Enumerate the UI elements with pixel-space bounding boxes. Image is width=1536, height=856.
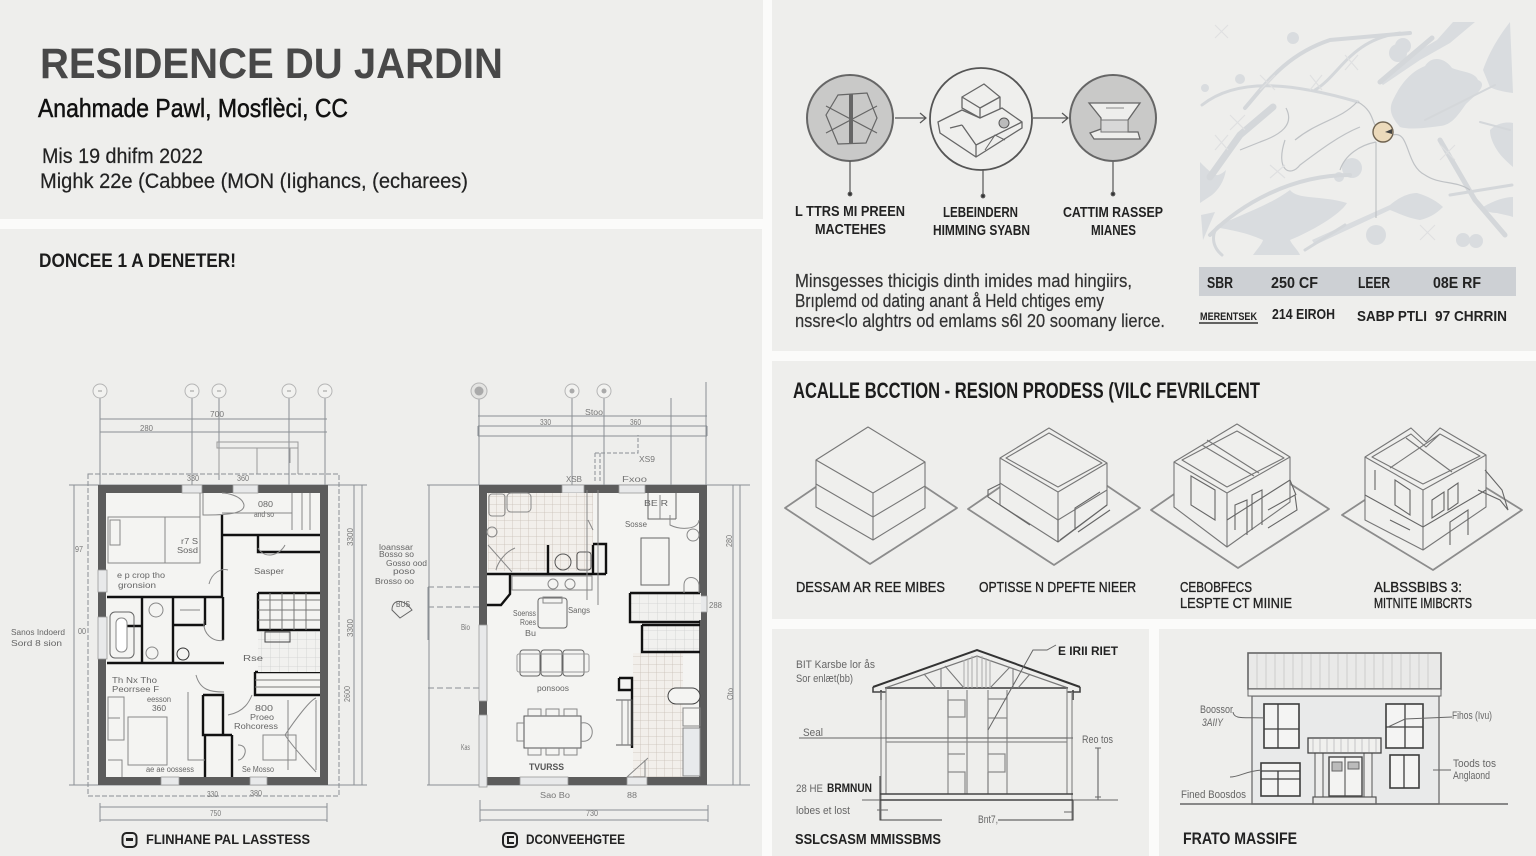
room labels: ae ae oossess — [146, 765, 194, 774]
panel: front elevation — [1159, 629, 1536, 856]
dimension labels: 750 — [210, 809, 221, 818]
dimension labels: 00 — [78, 627, 86, 636]
elevation annotations: Boossor — [1200, 704, 1233, 716]
project details: Mis 19 dhifm 2022 — [42, 145, 203, 168]
room labels: and so — [254, 510, 274, 519]
massing step 2 — [968, 428, 1140, 565]
room labels: Soenss — [513, 609, 536, 618]
title: RESIDENCE DU JARDIN — [40, 40, 503, 88]
site data table: SABP PTLI — [1357, 308, 1427, 325]
grid bubbles and dimension lines — [69, 384, 367, 822]
section caption: SSLCSASM MMISSBMS — [795, 831, 941, 848]
room labels: Sosse — [625, 520, 648, 529]
arrow — [895, 113, 926, 123]
ground line — [1180, 803, 1508, 805]
dimension labels: Oto — [726, 687, 735, 700]
outer walls — [483, 489, 703, 781]
building section drawing — [795, 644, 1119, 848]
concept paragraph — [795, 271, 1165, 331]
room labels: Roes — [520, 618, 536, 627]
site data table: MERENTSEK — [1200, 311, 1257, 323]
side note — [11, 628, 65, 648]
windows — [1261, 704, 1423, 796]
concept paragraph: Minsgesses thicigis dinth imides mad hingiirs, — [795, 271, 1132, 291]
map water and vegetation masses — [1200, 22, 1513, 255]
project details: Mighk 22e (Cabbee (MON (Iighancs, (echarees) — [40, 170, 468, 193]
room labels: Sasper — [254, 567, 284, 576]
side note with marker: Gosso ood — [386, 559, 427, 568]
room labels: 080 — [258, 500, 274, 509]
walls floors and shaft — [881, 688, 1072, 820]
section annotations: Seal — [803, 727, 823, 739]
datum line and dimension — [799, 738, 1101, 800]
room labels: r7 S — [181, 537, 198, 546]
elevation leaders — [1230, 712, 1452, 777]
subtitle: Anahmade Pawl, Mosflèci, CC — [38, 93, 348, 123]
elevation caption: FRATO MASSIFE — [1183, 829, 1297, 848]
tile floors — [488, 493, 701, 777]
step labels: MACTEHES — [815, 221, 886, 238]
room labels: ponsoos — [537, 684, 569, 693]
icon: form circle — [1070, 75, 1156, 161]
dimension labels: 380 — [250, 789, 262, 798]
dimension labels: 360 — [237, 474, 249, 483]
room labels: eesson — [147, 695, 171, 704]
room labels — [112, 500, 284, 774]
step labels: L TTRS MI PREEN — [795, 203, 905, 220]
side note with marker: loanssar — [379, 543, 413, 552]
panel: title block — [0, 0, 763, 219]
section annotations: Bnt7, — [978, 814, 998, 826]
location marker — [1373, 122, 1393, 142]
site map — [1200, 22, 1513, 255]
elevation annotations: 3AIIY — [1202, 717, 1224, 729]
dimension labels: XS9 — [639, 455, 656, 464]
concept process diagram — [795, 68, 1163, 239]
dimension labels: 330 — [207, 790, 218, 799]
map roads and rivers — [1202, 33, 1512, 255]
slab and foundation — [862, 776, 1118, 820]
room labels: TVURSS — [529, 762, 564, 772]
dimension labels: 360 — [630, 418, 641, 427]
dimension labels — [461, 408, 735, 818]
room labels: BE R — [644, 499, 668, 508]
dimension labels: 700 — [210, 410, 225, 419]
elevation annotations: Fihos (Ivu) — [1452, 710, 1492, 722]
outer walls — [102, 489, 324, 781]
dimension labels: 330 — [540, 418, 551, 427]
massing step labels: ALBSSBIBS 3: — [1374, 579, 1462, 596]
plan caption: FLINHANE PAL LASSTESS — [146, 831, 310, 847]
side note with marker — [375, 543, 427, 618]
massing step labels — [796, 579, 1472, 612]
dimension labels: 3300 — [346, 618, 355, 637]
room labels: Sosd — [177, 546, 198, 555]
site data table: 250 CF — [1271, 275, 1318, 292]
dimension labels: 88 — [627, 791, 638, 800]
room labels: Th Nx Tho — [112, 676, 158, 685]
room labels: Bu — [525, 629, 536, 638]
dimension labels: 2600 — [343, 686, 352, 702]
front elevation drawing — [1180, 653, 1508, 848]
room labels: e p crop tho — [117, 571, 166, 580]
step labels — [795, 203, 1163, 239]
room labels: Rohcoress — [234, 722, 278, 731]
arrow — [1033, 113, 1068, 123]
step labels: MIANES — [1091, 222, 1136, 239]
fixtures and furniture — [487, 490, 700, 777]
room labels — [513, 499, 668, 772]
massing step 4 — [1342, 428, 1522, 570]
icon: volume circle — [930, 68, 1032, 170]
grid bubbles and dimension lines — [427, 382, 750, 822]
entrance porch — [1308, 738, 1381, 804]
floor plan: upper level — [11, 384, 367, 847]
site data table: SBR — [1207, 275, 1233, 292]
interior walls — [487, 544, 700, 748]
section annotations: 28 HE — [796, 783, 823, 795]
interior walls — [107, 515, 320, 777]
massing step labels: OPTISSE N DPEFTE NIEER — [979, 579, 1136, 596]
dimension labels: Bio — [461, 623, 470, 632]
floor plans heading: DONCEE 1 A DENETER! — [39, 251, 236, 272]
step labels: HIMMING SYABN — [933, 222, 1030, 239]
site data table — [1199, 267, 1516, 325]
dimension labels: 280 — [140, 424, 154, 433]
section annotations: lobes et lost — [796, 805, 850, 817]
massing step 3 — [1151, 424, 1329, 568]
dimension labels: 330 — [187, 474, 199, 483]
massing step labels: LESPTE CT MIINIE — [1180, 595, 1292, 612]
dimension labels: Fxoo — [622, 475, 648, 484]
panel: concept diagram and site map — [772, 0, 1536, 351]
elevation annotations: Anglaond — [1453, 770, 1490, 782]
room labels: Se Mosso — [242, 765, 274, 774]
side note: Sanos Indoerd — [11, 628, 65, 637]
room labels: 800 — [255, 704, 274, 713]
side note with marker: poso — [393, 567, 416, 576]
wall openings — [479, 485, 707, 787]
dimension labels: XSB — [566, 475, 582, 484]
section annotations: Reo tos — [1082, 734, 1113, 746]
section annotations: BIT Karsbe lor ås — [796, 659, 875, 671]
leader — [988, 645, 1056, 730]
section annotations: E IRII RIET — [1058, 644, 1119, 658]
plan caption: DCONVEEHGTEE — [526, 831, 625, 847]
room labels: Sangs — [568, 606, 590, 615]
map faint plant sprigs — [1215, 25, 1455, 240]
room labels: Peorrsee F — [112, 685, 159, 694]
dimension labels: Sao Bo — [540, 791, 571, 800]
icon: massing plan circle — [807, 75, 893, 161]
massing step 1 — [785, 427, 957, 564]
concept paragraph: nssre<lo alghtrs od emlams s6l 20 soomany lierce. — [795, 311, 1165, 331]
step labels: LEBEINDERN — [943, 204, 1018, 221]
dimension labels: 280 — [725, 535, 734, 547]
section annotations: Sor enlæt(bb) — [796, 673, 853, 685]
facade wall — [1252, 696, 1439, 804]
room labels: Proeo — [250, 713, 275, 722]
floor plan: ground level — [375, 382, 750, 847]
step labels: CATTIM RASSEP — [1063, 204, 1163, 221]
elevation annotations: Toods tos — [1453, 758, 1496, 770]
section annotations: BRMNUN — [827, 781, 872, 795]
section annotations — [796, 644, 1119, 826]
elevation annotations — [1181, 704, 1496, 801]
site data table: 97 CHRRIN — [1435, 308, 1507, 325]
dimension labels — [75, 410, 355, 818]
side note: Sord 8 sion — [11, 639, 62, 648]
massing step labels: MITNITE IMIBCRTS — [1374, 595, 1472, 612]
panel: massing process — [772, 361, 1536, 619]
window openings — [98, 485, 267, 785]
room labels: gronsion — [118, 581, 156, 590]
dimension labels: 730 — [586, 809, 598, 818]
massing step labels: CEBOBFECS — [1180, 579, 1252, 596]
leader lines — [848, 161, 1115, 198]
side note with marker: Brosso oo — [375, 577, 415, 586]
room labels: 360 — [152, 704, 167, 713]
site data table: 08E RF — [1433, 275, 1481, 292]
panel: floor plans — [0, 229, 762, 856]
concept paragraph: Brıplemd od dating anant å Held chtiges emy — [795, 291, 1104, 311]
massing process heading: ACALLE BCCTION - RESION PRODESS (VILC FEVRILCENT — [793, 378, 1260, 403]
site data table: 214 EIROH — [1272, 306, 1335, 323]
site data table: LEER — [1358, 275, 1390, 292]
elevation annotations: Fined Boosdos — [1181, 789, 1246, 801]
roof — [1248, 653, 1441, 696]
roof and trusses — [873, 650, 1080, 700]
dimension labels: Stoo — [585, 408, 604, 417]
side note with marker: BUS — [396, 600, 410, 609]
room labels: Rse — [243, 654, 264, 663]
panel: building section — [772, 629, 1149, 856]
dimension labels: 3300 — [346, 527, 355, 546]
map thin paths — [1240, 102, 1470, 218]
dimension labels: Kas — [461, 743, 470, 752]
dimension labels: 288 — [709, 601, 723, 610]
dimension labels: 97 — [75, 545, 83, 554]
furniture and fixtures — [108, 493, 320, 777]
massing step labels: DESSAM AR REE MIBES — [796, 579, 945, 596]
project details — [40, 145, 468, 193]
side note with marker: Bosso so — [379, 550, 415, 559]
